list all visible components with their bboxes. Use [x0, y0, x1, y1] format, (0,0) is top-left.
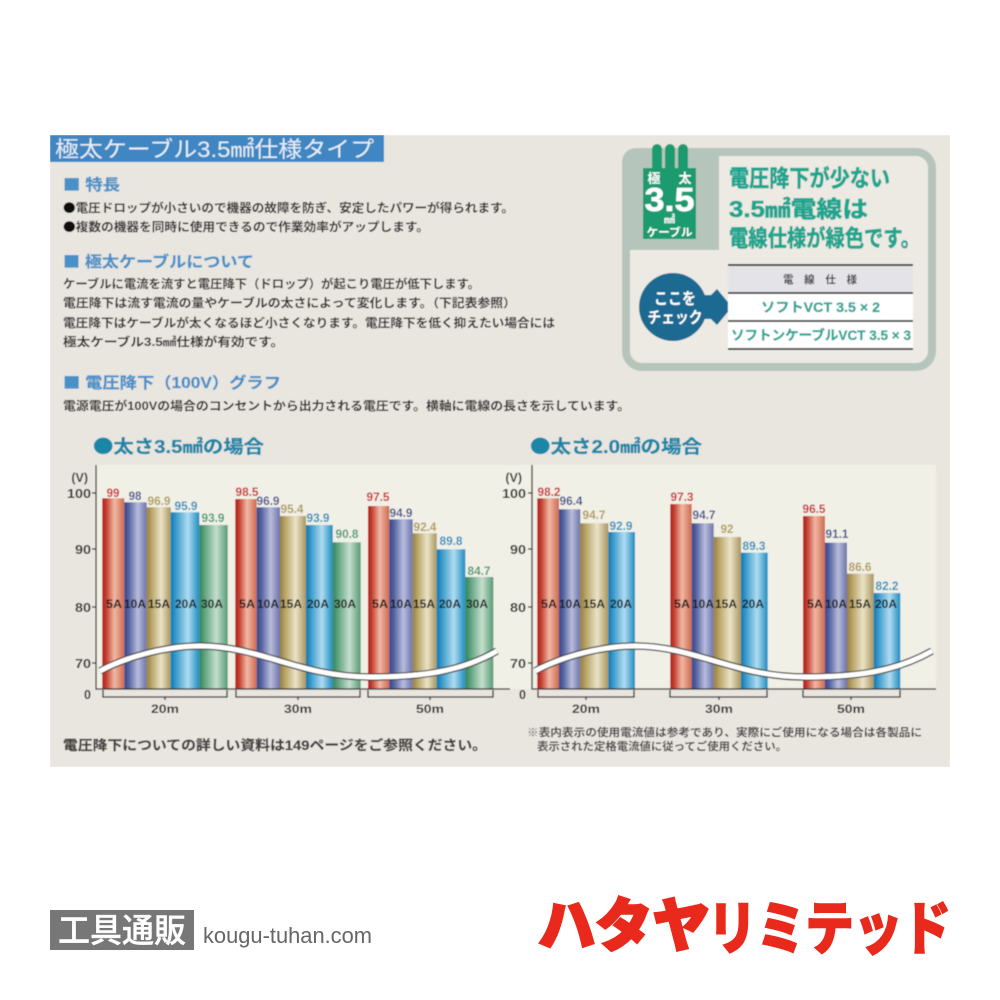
value labels: 96.9	[148, 496, 170, 508]
axis labels 2: 0	[519, 688, 526, 702]
value labels 2: 91.1	[826, 529, 849, 541]
table: cable specification: ソフトVCT 3.5 × 2	[761, 300, 880, 315]
current labels: 20A	[307, 599, 329, 611]
reference note: 電圧降下についての詳しい資料は149ページをご参照ください。	[63, 737, 487, 753]
value labels: 89.8	[440, 536, 463, 548]
current labels 2: 5A	[807, 599, 823, 611]
footnote: ※表内表示の使用電流値は参考であり、実際にご使用になる場合は各製品に	[527, 725, 922, 739]
value labels 2: 82.2	[876, 581, 898, 593]
bar chart: 2.0	[502, 465, 936, 716]
current labels: 5A	[106, 599, 122, 611]
table: cable specification: ソフトンケーブルVCT 3.5 × 3	[731, 327, 911, 343]
value labels 2: 92.9	[610, 521, 632, 533]
current labels: 10A	[124, 599, 146, 611]
value labels: 84.7	[468, 566, 490, 578]
length labels: 20m	[151, 704, 179, 716]
icon: thick cable tag: 3.5	[644, 181, 694, 218]
section: features: ●電圧ドロップが小さいので機器の故障を防ぎ、安定したパワーが得られます。	[63, 199, 514, 216]
bar chart: 3.5	[67, 465, 510, 716]
logo: kougu-tuhan: kougu-tuhan.com	[203, 923, 372, 948]
axis labels: 70	[75, 657, 91, 671]
logo: kougu-tuhan: 工具通販	[58, 912, 186, 949]
table: cable specification	[728, 264, 913, 350]
axes and brackets	[92, 465, 510, 700]
bars: 50m	[368, 506, 493, 689]
current labels: 30A	[201, 599, 223, 611]
value labels 2: 97.3	[670, 492, 694, 504]
value labels: 93.9	[306, 513, 330, 525]
title bar: 極太ケーブル3.5㎟仕様タイプ	[55, 137, 374, 162]
logo: kougu-tuhan	[50, 910, 372, 950]
value labels 2: 96.4	[560, 496, 583, 508]
section: about thick cable	[63, 250, 555, 349]
icon: thick cable tag: ケーブル	[646, 225, 692, 239]
value labels 2: 86.6	[848, 562, 872, 574]
length labels	[151, 704, 444, 716]
icon: check here arrow badge	[639, 273, 732, 341]
current labels 2: 20A	[742, 599, 764, 611]
length labels 2	[572, 704, 865, 716]
current labels: 30A	[334, 599, 356, 611]
value labels: 95.4	[280, 504, 304, 516]
footnote	[527, 725, 922, 753]
bars: 20m	[102, 498, 228, 689]
section: about thick cable: ケーブルに電流を流すと電圧降下（ドロップ）が起こり電圧が低下します。	[63, 276, 480, 291]
section: features: ●複数の機器を同時に使用できるので作業効率がアップします。	[63, 218, 429, 235]
value labels: 99	[107, 488, 119, 500]
current labels 2: 5A	[541, 599, 557, 611]
section: voltage drop graph heading: 電源電圧が100Vの場合のコンセントから出力される電圧です。横軸に電線の長さを示しています。	[63, 398, 630, 413]
current labels 2	[541, 599, 897, 611]
current labels 2: 10A	[692, 599, 714, 611]
value labels: 90.8	[336, 529, 359, 541]
current labels: 10A	[390, 599, 412, 611]
footnote: 表示された定格電流値に従ってご使用ください。	[537, 739, 787, 753]
icon: thick cable tag: ㎟	[664, 213, 675, 226]
panel: catalog page	[50, 135, 950, 767]
value labels: 93.9	[202, 513, 224, 525]
value labels: 98.5	[236, 487, 259, 499]
current labels 2: 5A	[674, 599, 690, 611]
callout headline: 3.5㎟電線は	[729, 196, 868, 222]
current labels 2: 10A	[825, 599, 847, 611]
section: voltage drop graph heading	[63, 371, 630, 413]
axis labels	[67, 471, 91, 702]
axis labels: 100	[67, 487, 91, 501]
current labels: 30A	[466, 599, 488, 611]
current labels: 15A	[280, 599, 302, 611]
current labels: 10A	[257, 599, 279, 611]
value labels: 95.9	[174, 501, 198, 513]
current labels: 15A	[413, 599, 435, 611]
length labels 2: 20m	[572, 704, 600, 716]
current labels 2: 15A	[583, 599, 605, 611]
length labels 2: 50m	[837, 704, 865, 716]
chart heading: 3.5: ●太さ3.5㎟の場合	[93, 433, 264, 459]
length labels: 50m	[416, 704, 444, 716]
value labels 2: 89.3	[742, 541, 766, 553]
axis break wave	[100, 646, 497, 677]
length labels: 30m	[284, 704, 312, 716]
icon: check here arrow badge: ここを	[654, 290, 696, 308]
chart background	[94, 465, 936, 689]
section: features: ■ 特長	[63, 173, 121, 195]
axes and brackets 2	[528, 465, 936, 700]
axis labels: 80	[75, 601, 91, 615]
axis labels 2: (V)	[505, 471, 522, 485]
value labels	[107, 487, 490, 578]
current labels 2: 10A	[559, 599, 581, 611]
section: voltage drop graph heading: ■ 電圧降下（100V）グラフ	[63, 371, 281, 393]
icon: thick cable tag: 極	[647, 171, 661, 186]
axis labels 2: 90	[510, 543, 526, 557]
length labels 2: 30m	[705, 704, 733, 716]
current labels 2: 15A	[849, 599, 871, 611]
value labels: 98	[129, 491, 142, 503]
current labels 2: 20A	[875, 599, 897, 611]
bars 2: 20m	[537, 498, 635, 689]
current labels: 5A	[239, 599, 255, 611]
value labels 2: 94.7	[582, 510, 606, 522]
value labels 2	[538, 487, 898, 593]
axis labels 2: 100	[502, 487, 526, 501]
value labels: 94.9	[390, 508, 412, 520]
axis labels 2: 80	[510, 601, 526, 615]
bars: 30m	[235, 499, 361, 689]
current labels	[106, 599, 488, 611]
logo: Hataya Limited: リミテッド	[708, 897, 951, 962]
value labels 2: 94.7	[692, 510, 716, 522]
section: about thick cable: 極太ケーブル3.5㎟仕様が有効です。	[63, 334, 284, 349]
icon: thick cable tag	[643, 144, 696, 239]
bars 2: 30m	[670, 504, 768, 689]
callout headline: 電線仕様が緑色です。	[729, 225, 920, 251]
current labels: 20A	[439, 599, 461, 611]
section: about thick cable: 電圧降下は流す電流の量やケーブルの太さによって変化します。（下記表参照）	[63, 295, 516, 310]
logo: Hataya Limited	[538, 894, 951, 962]
current labels: 20A	[175, 599, 197, 611]
icon: check here arrow badge: チェック	[648, 309, 702, 327]
current labels: 15A	[148, 599, 170, 611]
current labels: 5A	[372, 599, 388, 611]
logo: Hataya Limited: ハタヤ	[538, 894, 710, 959]
axis labels 2	[502, 471, 526, 702]
axis labels 2: 70	[510, 657, 526, 671]
value labels 2: 98.2	[538, 487, 560, 499]
section: about thick cable: 電圧降下はケーブルが太くなるほど小さくなります。電圧降下を低く抑えたい場合には	[63, 315, 555, 330]
callout headline	[729, 165, 920, 251]
value labels: 92.4	[414, 522, 437, 534]
section: features	[63, 173, 514, 235]
current labels 2: 20A	[610, 599, 632, 611]
panel: check callout	[622, 144, 932, 367]
section: about thick cable: ■ 極太ケーブルについて	[63, 250, 254, 272]
value labels 2: 96.5	[802, 504, 826, 516]
table: cable specification: 電 線 仕 様	[783, 273, 858, 286]
value labels: 97.5	[366, 492, 390, 504]
value labels: 96.9	[256, 496, 280, 508]
axis labels: 90	[75, 543, 91, 557]
icon: thick cable tag: 太	[678, 171, 692, 186]
axis break wave 2	[535, 646, 932, 677]
chart heading: 2.0: ●太さ2.0㎟の場合	[530, 433, 702, 459]
axis labels: (V)	[71, 471, 88, 485]
value labels 2: 92	[721, 524, 733, 536]
axis labels: 0	[84, 688, 91, 702]
callout headline: 電圧降下が少ない	[729, 165, 890, 191]
bars 2: 50m	[803, 516, 900, 689]
current labels 2: 15A	[715, 599, 737, 611]
